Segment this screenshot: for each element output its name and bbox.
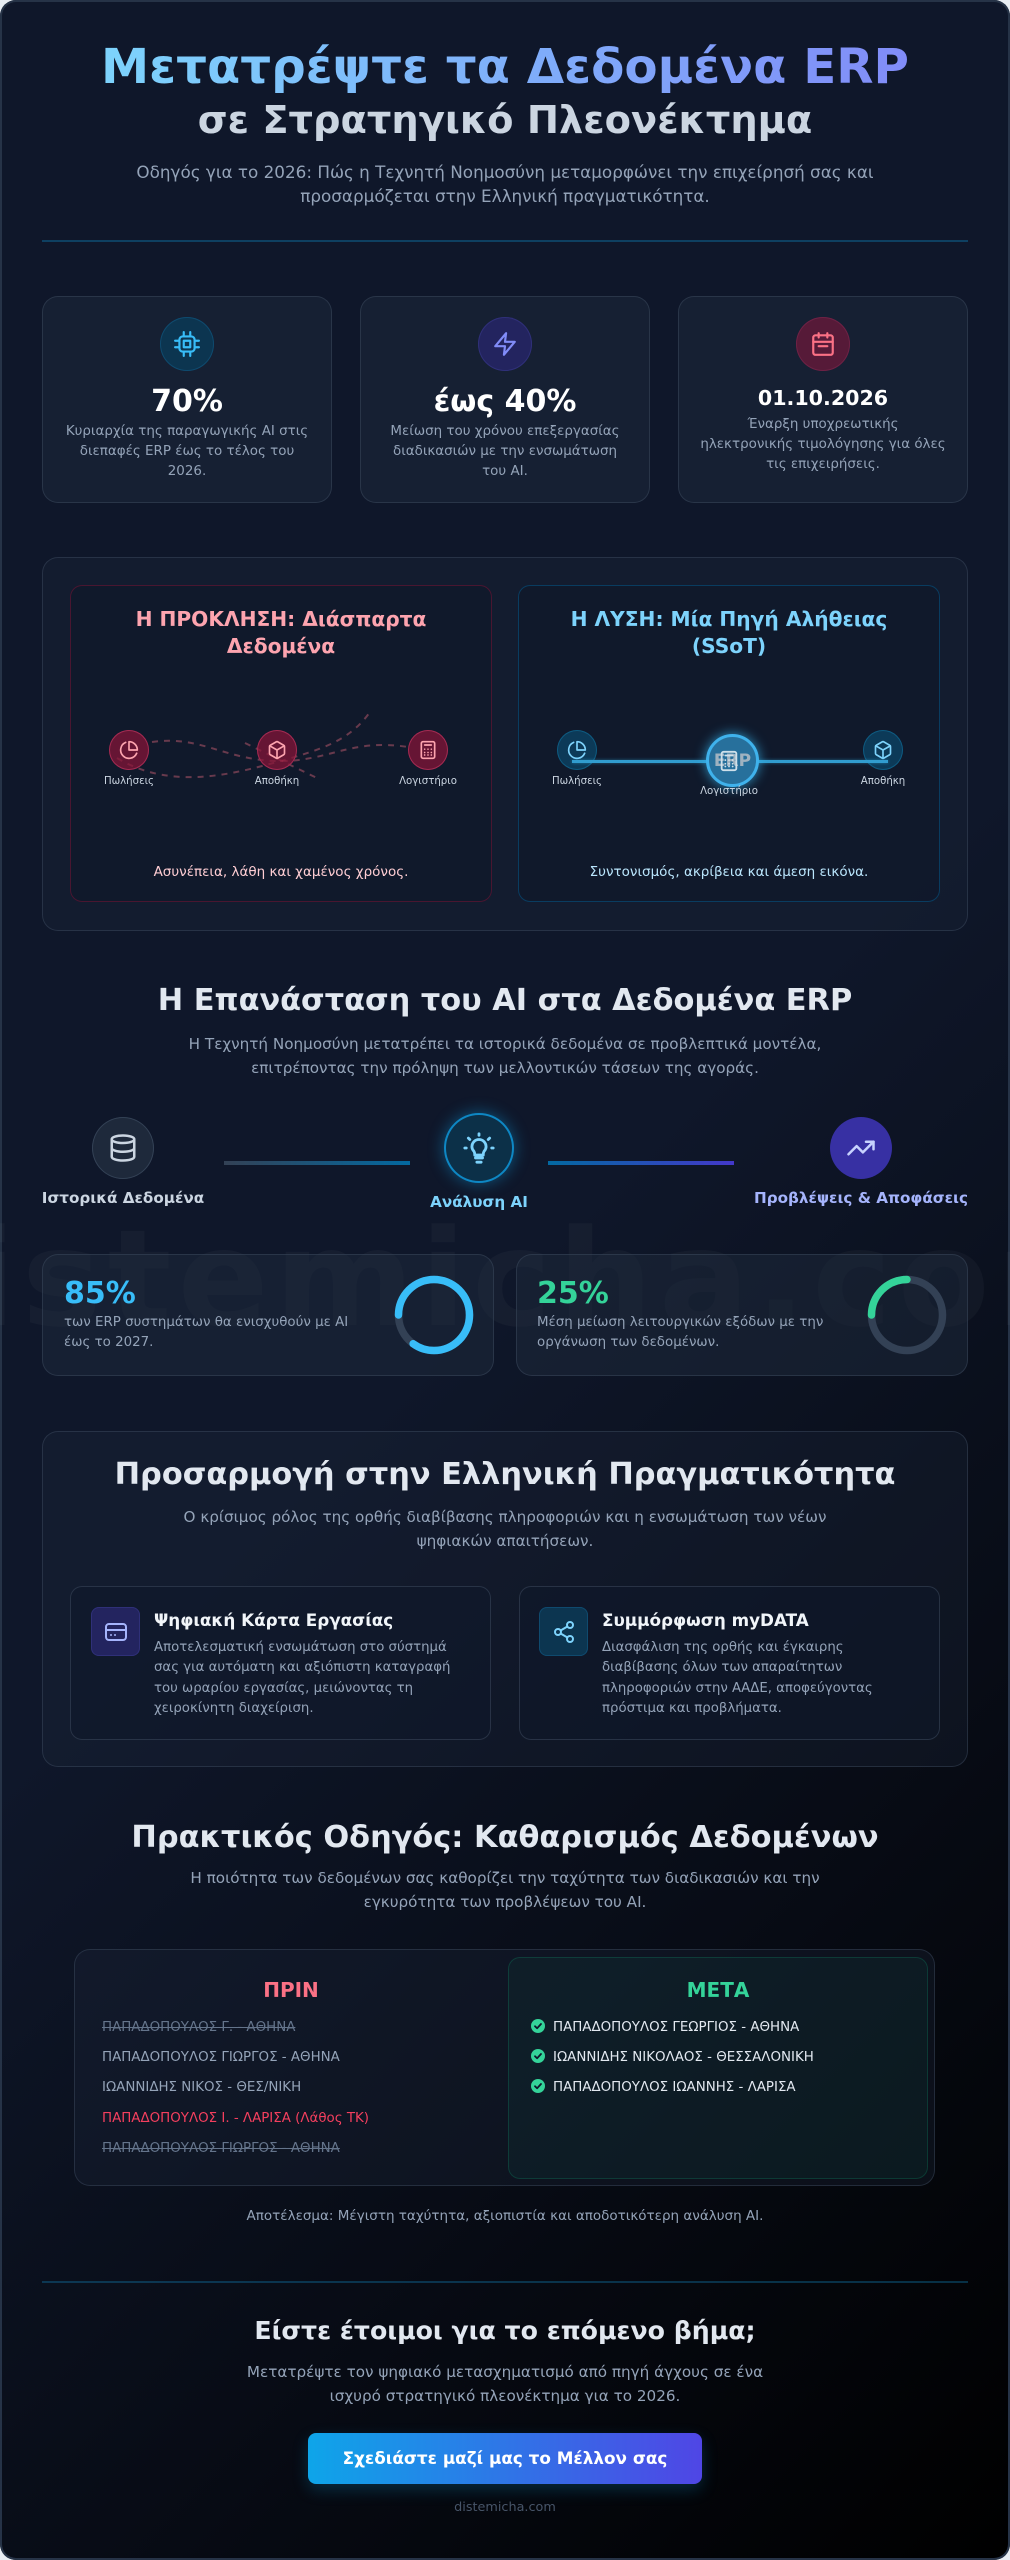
card description: πληροφοριών στην ΑΑΔΕ, αποφεύγοντας xyxy=(602,1681,873,1696)
section intro: practical guide: Η ποιότητα των δεδομένων σας καθορίζει την ταχύτητα των διαδικασιών και την xyxy=(190,1869,820,1887)
icon: cpu xyxy=(160,317,214,371)
node: warehouse xyxy=(863,730,903,770)
label: historical data: Ιστορικά Δεδομένα xyxy=(42,1189,204,1207)
stat description: Κυριαρχία της παραγωγικής AI στις xyxy=(66,424,308,439)
stat description: του AI. xyxy=(482,464,528,479)
panel: stat card 40% xyxy=(360,296,650,503)
stat description: των ERP συστημάτων θα ενισχυθούν με AI xyxy=(64,1315,348,1330)
panel: challenge and solution xyxy=(42,557,968,931)
panel: stat card date xyxy=(678,296,968,503)
stat description: διαδικασιών με την ενσωμάτωση xyxy=(393,444,617,459)
stat value: 70% xyxy=(151,384,223,419)
flow diagram xyxy=(42,1104,968,1211)
label: warehouse: Αποθήκη xyxy=(255,776,299,787)
footer site: distemicha.com xyxy=(454,2500,556,2515)
subtitle: προσαρμόζεται στην Ελληνική πραγματικότητα. xyxy=(300,186,710,206)
card description: Διασφάλιση της ορθής και έγκαιρης xyxy=(602,1640,844,1655)
panel: solution xyxy=(518,585,940,902)
card description xyxy=(154,1640,450,1716)
call to action text xyxy=(247,2363,763,2405)
stat description xyxy=(537,1315,823,1350)
title line two: σε Στρατηγικό Πλεονέκτημα xyxy=(198,98,812,143)
icon: lightning xyxy=(478,317,532,371)
card title: Συμμόρφωση myDATA xyxy=(602,1610,809,1630)
section heading: AI revolution: Η Επανάσταση του AI στα Δεδομένα ERP xyxy=(158,983,852,1018)
section intro: AI revolution xyxy=(189,1035,821,1077)
heading: Προσαρμογή στην Ελληνική Πραγματικότητα xyxy=(115,1457,895,1492)
label: sales: Πωλήσεις xyxy=(552,776,602,787)
card description: σας για αυτόματη και αξιόπιστη καταγραφή xyxy=(154,1660,450,1675)
stat description xyxy=(66,424,308,479)
solution heading: Η ΛΥΣΗ: Μία Πηγή Αλήθειας xyxy=(571,607,887,631)
panel: before and after xyxy=(74,1949,935,2186)
section intro: AI revolution: Η Τεχνητή Νοημοσύνη μετατρέπει τα ιστορικά δεδομένα σε προβλεπτικά μοντέλα, xyxy=(189,1035,821,1053)
title line one: Μετατρέψτε τα Δεδομένα ERP xyxy=(101,39,909,95)
section intro: practical guide: εγκυρότητα των προβλέψεων του AI. xyxy=(364,1893,646,1911)
after row one: ΠΑΠΑΔΟΠΟΥΛΟΣ ΓΕΩΡΓΙΟΣ - ΑΘΗΝΑ xyxy=(553,2020,799,2035)
stat description xyxy=(700,417,946,472)
step: forecasts xyxy=(830,1117,892,1179)
after row two: ΙΩΑΝΝΙΔΗΣ ΝΙΚΟΛΑΟΣ - ΘΕΣΣΑΛΟΝΙΚΗ xyxy=(553,2050,814,2065)
stat value: 85% xyxy=(64,1276,136,1311)
node: sales xyxy=(109,730,149,770)
call to action text: ισχυρό στρατηγικό πλεονέκτημα για το 2026. xyxy=(330,2387,680,2405)
row: ΠΑΠΑΔΟΠΟΥΛΟΣ ΓΙΩΡΓΟΣ - ΑΘΗΝΑ xyxy=(102,2141,340,2156)
stat description: Έναρξη υποχρεωτικής xyxy=(747,417,899,432)
intro xyxy=(184,1508,826,1550)
card description: πρόστιμα και προβλήματα. xyxy=(602,1701,782,1716)
connection line xyxy=(572,760,888,763)
after panel xyxy=(508,1957,928,2179)
stat description xyxy=(64,1315,348,1350)
card: digital work card xyxy=(70,1586,491,1740)
card title: Ψηφιακή Κάρτα Εργασίας xyxy=(154,1610,393,1630)
result note: Αποτέλεσμα: Μέγιστη ταχύτητα, αξιοπιστία και αποδοτικότερη ανάλυση AI. xyxy=(247,2208,763,2224)
stat description: διεπαφές ERP έως το τέλος του xyxy=(80,444,294,459)
arrow connector two xyxy=(548,1161,734,1165)
panel: stat card 70% xyxy=(42,296,332,503)
icon: card xyxy=(91,1607,140,1656)
icon: calculator xyxy=(720,750,738,772)
stat value: 01.10.2026 xyxy=(758,386,888,410)
card description: διαβίβασης όλων των απαραίτητων xyxy=(602,1660,842,1675)
step: historical data xyxy=(92,1117,154,1179)
stat description: Μέση μείωση λειτουργικών εξόδων με την xyxy=(537,1315,823,1330)
ring chart 85% xyxy=(394,1276,474,1354)
panel: challenge xyxy=(70,585,492,902)
call to action heading: Είστε έτοιμοι για το επόμενο βήμα; xyxy=(254,2316,756,2345)
scattered dashed connections xyxy=(116,714,406,778)
ring chart 25% xyxy=(868,1276,946,1354)
panel: Greek reality xyxy=(42,1431,968,1767)
hub: ERP xyxy=(706,734,759,787)
subtitle xyxy=(136,162,874,206)
icon: share xyxy=(539,1607,588,1656)
node: sales xyxy=(557,730,597,770)
stat value: 25% xyxy=(537,1276,609,1311)
row: ΠΑΠΑΔΟΠΟΥΛΟΣ Ι. - ΛΑΡΙΣΑ (Λάθος ΤΚ) xyxy=(102,2111,369,2126)
section intro: AI revolution: επιτρέποντας την πρόληψη των μελλοντικών τάσεων της αγοράς. xyxy=(251,1059,759,1077)
call to action button: Σχεδιάστε μαζί μας το Μέλλον σας xyxy=(343,2448,667,2468)
stat description: 2026. xyxy=(168,464,206,479)
call to action button xyxy=(308,2433,702,2484)
card description: Αποτελεσματική ενσωμάτωση στο σύστημά xyxy=(154,1640,447,1655)
icon: calendar xyxy=(796,317,850,371)
stat description: έως το 2027. xyxy=(64,1335,153,1350)
challenge heading xyxy=(136,607,426,658)
title xyxy=(101,39,909,143)
call to action text: Μετατρέψτε τον ψηφιακό μετασχηματισμό από πηγή άγχους σε ένα xyxy=(247,2363,763,2381)
section heading: practical guide: Πρακτικός Οδηγός: Καθαρισμός Δεδομένων xyxy=(131,1820,879,1855)
section intro: practical guide xyxy=(190,1869,820,1911)
stat description: οργάνωση των δεδομένων. xyxy=(537,1335,719,1350)
node: warehouse xyxy=(257,730,297,770)
row: ΠΑΠΑΔΟΠΟΥΛΟΣ ΓΙΩΡΓΟΣ - ΑΘΗΝΑ xyxy=(102,2050,340,2065)
challenge heading: Δεδομένα xyxy=(227,634,335,658)
label: sales: Πωλήσεις xyxy=(104,776,154,787)
challenge heading: Η ΠΡΟΚΛΗΣΗ: Διάσπαρτα xyxy=(136,607,426,631)
label: AI analysis: Ανάλυση AI xyxy=(430,1193,528,1211)
arrow connector one xyxy=(224,1161,410,1165)
label: accounting: Λογιστήριο xyxy=(700,786,758,797)
intro: Ο κρίσιμος ρόλος της ορθής διαβίβασης πληροφοριών και η ενσωμάτωση των νέων xyxy=(184,1508,826,1526)
before heading: ΠΡΙΝ xyxy=(263,1978,319,2002)
hub: ERP: ERP xyxy=(714,750,751,770)
node: accounting xyxy=(408,730,448,770)
challenge caption: Ασυνέπεια, λάθη και χαμένος χρόνος. xyxy=(154,864,408,880)
stat description: τις επιχειρήσεις. xyxy=(766,457,880,472)
after row three: ΠΑΠΑΔΟΠΟΥΛΟΣ ΙΩΑΝΝΗΣ - ΛΑΡΙΣΑ xyxy=(553,2080,796,2095)
stat description xyxy=(390,424,620,479)
before list xyxy=(102,2020,369,2156)
panel: 85% stat xyxy=(42,1254,494,1376)
stat value: έως 40% xyxy=(434,384,576,419)
card description xyxy=(602,1640,873,1716)
stat description: ηλεκτρονικής τιμολόγησης για όλες xyxy=(700,437,946,452)
label: forecasts: Προβλέψεις & Αποφάσεις xyxy=(754,1189,968,1207)
card description: του ωραρίου εργασίας, μειώνοντας τη xyxy=(154,1681,413,1696)
subtitle: Οδηγός για το 2026: Πώς η Τεχνητή Νοημοσύνη μεταμορφώνει την επιχείρησή σας και xyxy=(136,162,874,182)
row: ΙΩΑΝΝΙΔΗΣ ΝΙΚΟΣ - ΘΕΣ/ΝΙΚΗ xyxy=(102,2080,301,2095)
card: myDATA xyxy=(519,1586,940,1740)
solution caption: Συντονισμός, ακρίβεια και άμεση εικόνα. xyxy=(590,864,868,880)
solution heading: (SSoT) xyxy=(692,634,766,658)
card description: χειροκίνητη διαχείριση. xyxy=(154,1701,314,1716)
solution heading xyxy=(571,607,887,658)
row: ΠΑΠΑΔΟΠΟΥΛΟΣ Γ. - ΑΘΗΝΑ xyxy=(102,2020,295,2035)
label: warehouse: Αποθήκη xyxy=(861,776,905,787)
panel: 25% stat xyxy=(516,1254,968,1376)
after heading: ΜΕΤΑ xyxy=(687,1978,749,2002)
stat description: Μείωση του χρόνου επεξεργασίας xyxy=(390,424,620,439)
intro: ψηφιακών απαιτήσεων. xyxy=(417,1532,593,1550)
label: accounting: Λογιστήριο xyxy=(399,776,457,787)
step: AI analysis xyxy=(444,1113,514,1183)
